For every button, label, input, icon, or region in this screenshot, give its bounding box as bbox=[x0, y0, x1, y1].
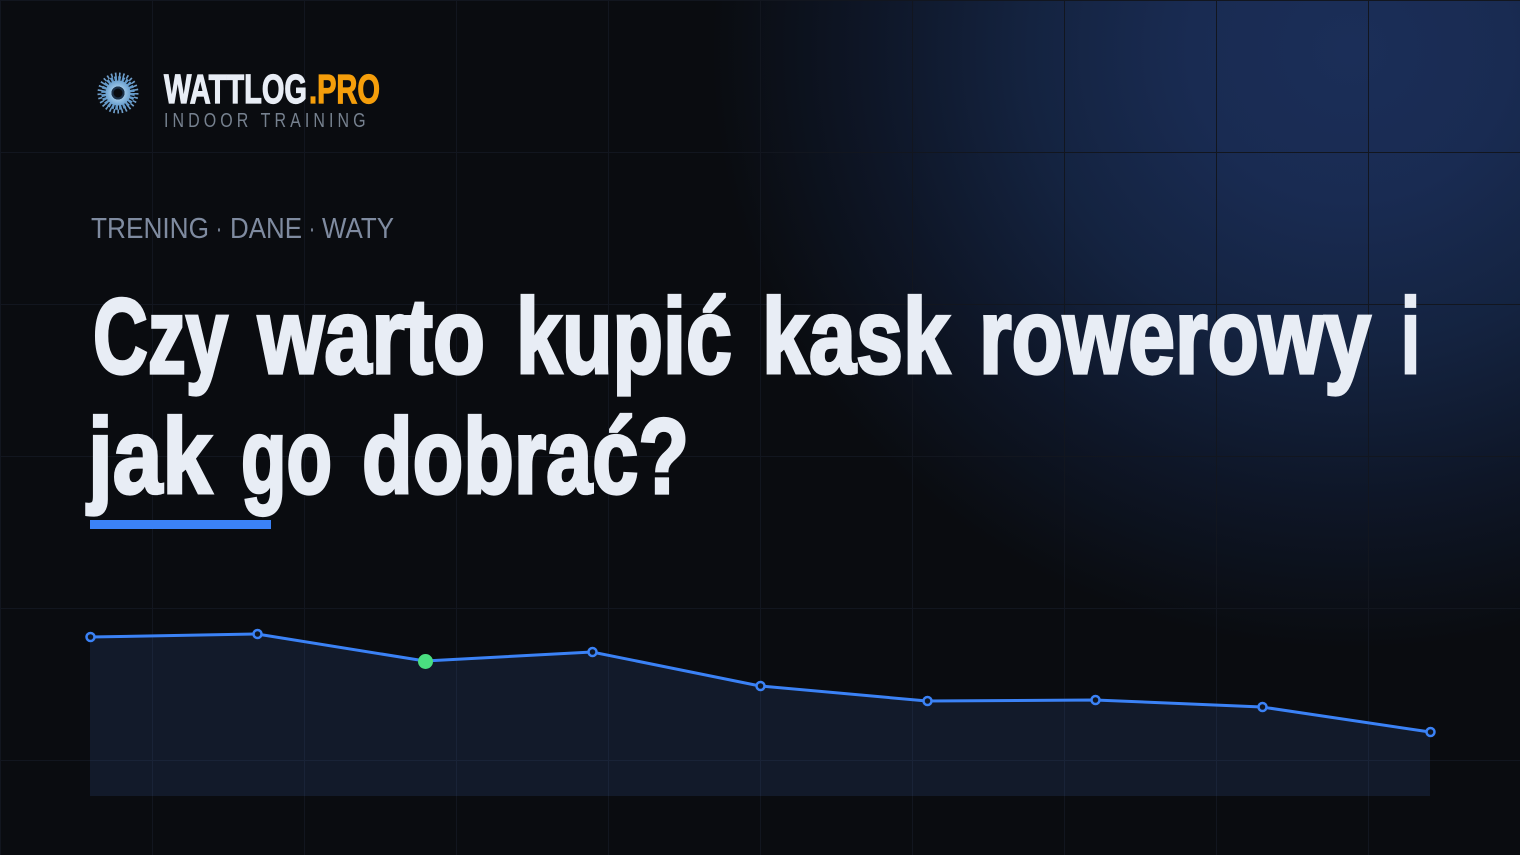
eyebrow: TRENING bbox=[91, 213, 209, 245]
eyebrow: · bbox=[216, 213, 222, 245]
highlighted data point bbox=[418, 654, 433, 669]
title: dobrać? bbox=[362, 396, 689, 516]
chart area bbox=[90, 634, 1430, 796]
title: warto bbox=[257, 276, 485, 396]
title: jak bbox=[86, 396, 212, 516]
line chart bbox=[86, 630, 1434, 796]
logo icon: bicycle cassette gear bbox=[100, 74, 136, 112]
brand name: WATTLOG bbox=[164, 66, 307, 112]
brand name: .PRO bbox=[309, 66, 380, 112]
brand tagline: INDOOR TRAINING bbox=[164, 109, 366, 131]
title: kupić bbox=[516, 276, 732, 396]
title: kask bbox=[762, 276, 950, 396]
eyebrow: · bbox=[309, 213, 315, 245]
title underline bbox=[90, 520, 271, 529]
eyebrow: DANE bbox=[230, 213, 302, 245]
chart line bbox=[90, 634, 1430, 732]
eyebrow: WATY bbox=[322, 213, 394, 245]
chart markers bbox=[86, 630, 1434, 736]
title: go bbox=[241, 396, 332, 516]
title: i bbox=[1401, 276, 1420, 396]
title: rowerowy bbox=[979, 276, 1371, 396]
title: Czy bbox=[93, 276, 228, 396]
